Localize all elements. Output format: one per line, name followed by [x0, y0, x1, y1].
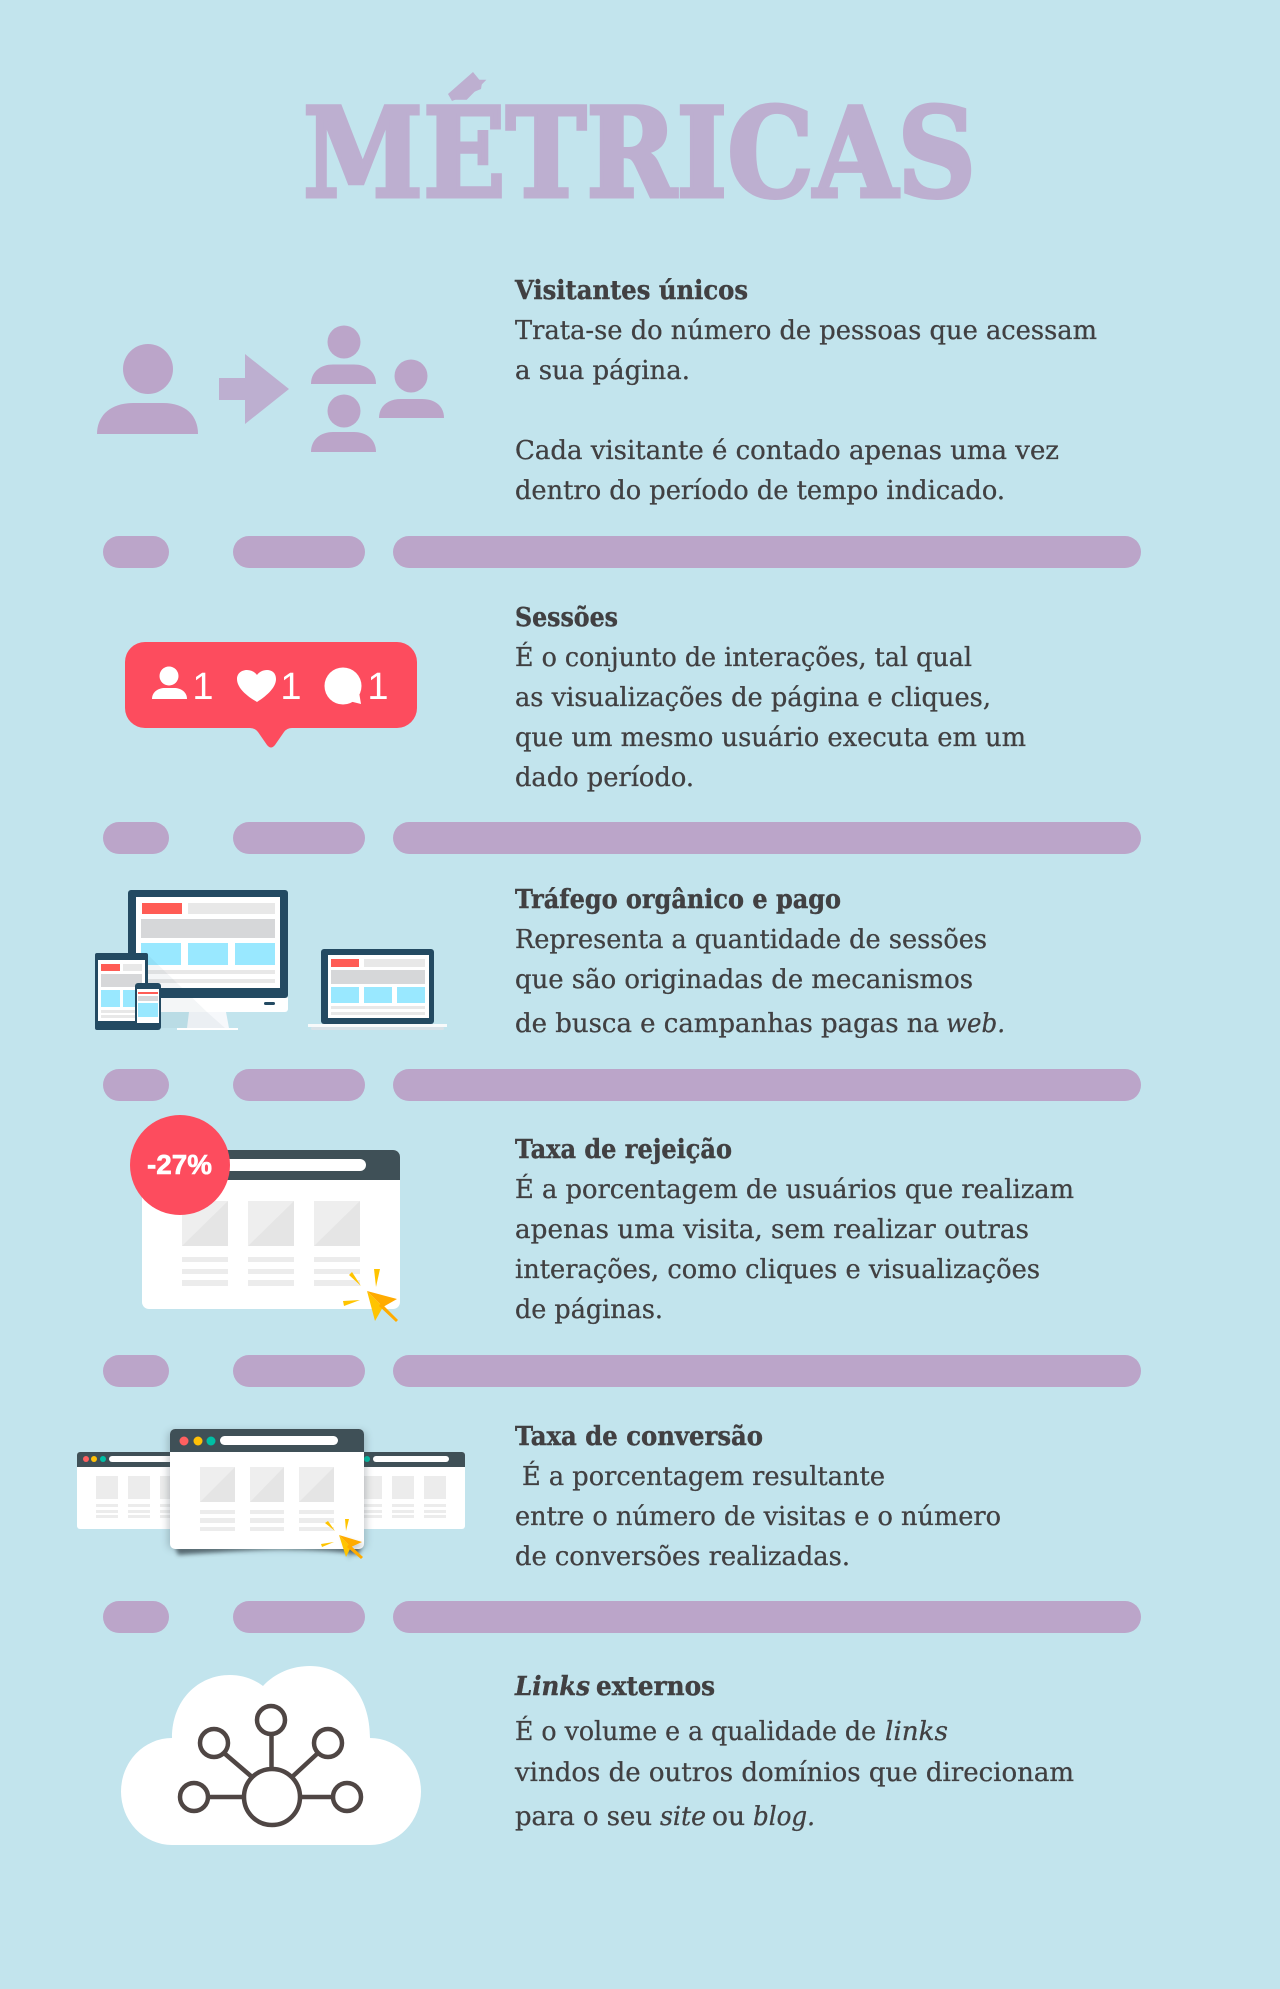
icon: notification bubble	[125, 642, 417, 748]
text: tráfego orgânico e pago: que são originadas de mecanismos	[515, 965, 973, 995]
text: taxa de conversão: de conversões realizadas.	[515, 1542, 850, 1572]
divider 5	[103, 1601, 1141, 1633]
text: taxa de rejeição: apenas uma visita, sem realizar outras	[515, 1215, 1029, 1245]
text: taxa de conversão	[515, 1422, 1001, 1572]
text: visitantes únicos: Trata-se do número de pessoas que acessam	[515, 316, 1097, 346]
text: taxa de rejeição	[515, 1135, 1074, 1325]
text: links externos: links	[885, 1717, 948, 1747]
text: tráfego orgânico e pago	[515, 885, 1005, 1039]
text: taxa de rejeição: É a porcentagem de usuários que realizam	[515, 1173, 1074, 1205]
text: links externos: para o seu	[515, 1802, 652, 1832]
text: tráfego orgânico e pago: Representa a quantidade de sessões	[515, 925, 987, 955]
text: taxa de conversão: É a porcentagem resultante	[522, 1460, 885, 1492]
divider 1	[103, 536, 1141, 568]
icon: notification bubble: 1	[280, 666, 302, 708]
text: taxa de rejeição: interações, como cliques e visualizações	[515, 1255, 1040, 1285]
text: taxa de conversão: entre o número de visitas e o número	[515, 1502, 1001, 1532]
text: taxa de rejeição: de páginas.	[515, 1295, 663, 1325]
divider 4	[103, 1355, 1141, 1387]
divider 3	[103, 1069, 1141, 1101]
text: sessões: as visualizações de página e cliques,	[515, 683, 991, 713]
text: tráfego orgânico e pago: Tráfego orgânico e pago	[515, 885, 841, 915]
text: links externos: vindos de outros domínios que direcionam	[514, 1758, 1074, 1788]
text: visitantes únicos: Visitantes únicos	[514, 276, 748, 306]
text: links externos: site	[660, 1802, 706, 1832]
icon: notification bubble: 1	[367, 666, 389, 708]
icon: network cloud	[121, 1666, 421, 1845]
text: links externos: externos	[596, 1672, 715, 1702]
text: visitantes únicos: Cada visitante é contado apenas uma vez	[515, 436, 1059, 466]
icon: one visitor becoming several	[97, 326, 444, 452]
text: links externos: Links	[514, 1672, 590, 1702]
text: sessões: dado período.	[515, 763, 694, 793]
text: links externos: É o volume e a qualidade de	[515, 1715, 876, 1747]
title: MÉTRICAS	[303, 82, 976, 226]
text: tráfego orgânico e pago: web.	[946, 1009, 1005, 1039]
text: sessões: que um mesmo usuário executa em um	[515, 723, 1026, 753]
text: tráfego orgânico e pago: de busca e campanhas pagas na	[515, 1009, 939, 1039]
icon: notification bubble: 1	[192, 666, 214, 708]
icon: bounce rate browser window: -27%	[147, 1149, 212, 1180]
text: links externos: blog.	[753, 1802, 815, 1832]
divider 2	[103, 822, 1141, 854]
icon: responsive devices	[95, 890, 447, 1030]
text: taxa de rejeição: Taxa de rejeição	[515, 1135, 732, 1165]
text: sessões: É o conjunto de interações, tal qual	[515, 641, 972, 673]
icon: bounce rate browser window	[130, 1115, 400, 1322]
text: visitantes únicos: dentro do período de tempo indicado.	[515, 476, 1005, 506]
text: taxa de conversão: Taxa de conversão	[515, 1422, 763, 1452]
text: visitantes únicos: a sua página.	[515, 356, 690, 386]
text: links externos	[514, 1672, 1074, 1832]
text: visitantes únicos	[514, 276, 1097, 506]
text: sessões: Sessões	[515, 603, 618, 633]
icon: conversion browser windows	[77, 1429, 465, 1560]
text: sessões	[515, 603, 1026, 793]
text: links externos: ou	[712, 1802, 745, 1832]
